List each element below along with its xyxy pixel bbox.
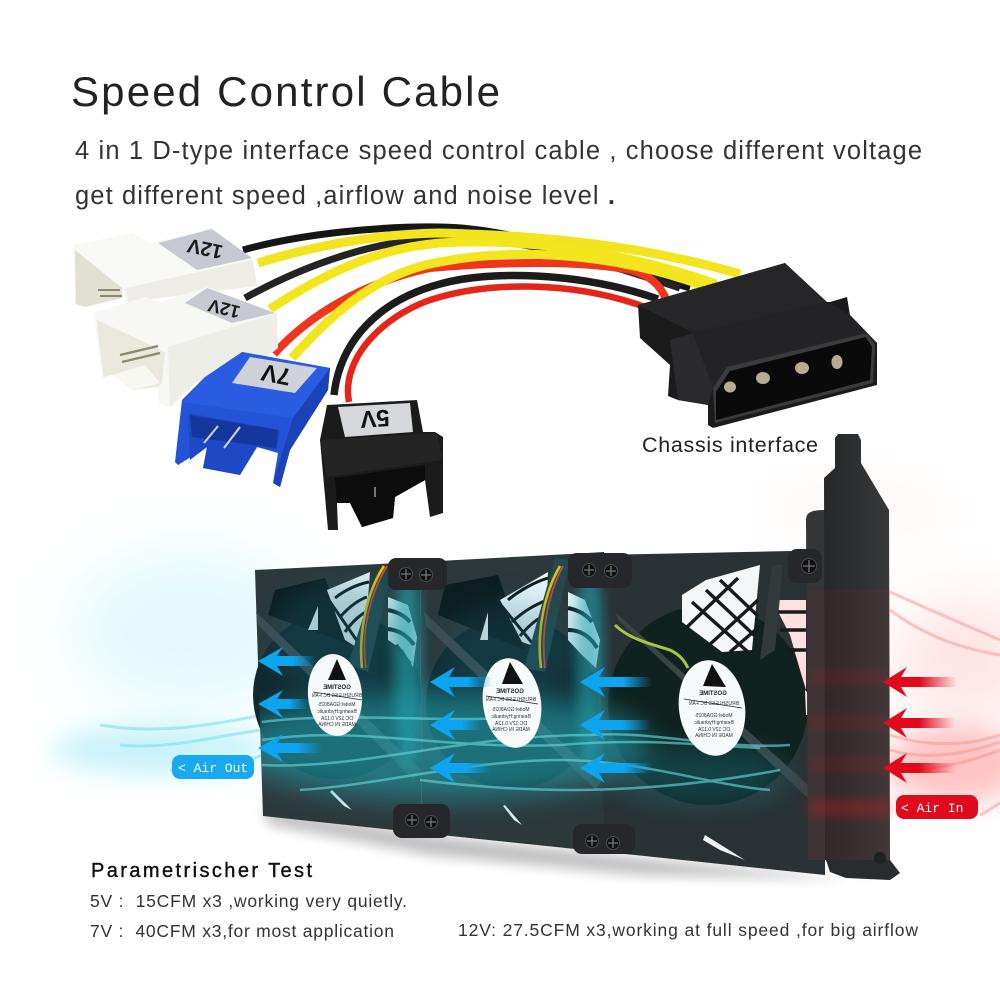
- fan assembly: [230, 434, 900, 880]
- parameter test lines: 7V : 40CFM x3,for most application: [90, 921, 394, 941]
- badge: air out: < Air Out: [178, 761, 248, 776]
- teal airflow overlay: [230, 550, 790, 805]
- fan labels: Model:GDA8025: [318, 702, 355, 708]
- connector: 5V black: 5V: [359, 404, 391, 432]
- fan labels: DC:12V 0.12A: [320, 716, 353, 722]
- pci bracket: [806, 434, 900, 880]
- subtitle text: [75, 137, 922, 210]
- fan labels: BRUSHLESS DC FAN: [689, 701, 739, 707]
- connector: 12V white (second): 12V: [206, 295, 242, 322]
- fan labels: MADE IN CHINA: [317, 722, 356, 728]
- connector: 5V black: [320, 400, 443, 530]
- parameter test lines: [90, 891, 918, 941]
- connector: 7V blue: [175, 352, 330, 487]
- screw plates: [388, 549, 822, 854]
- fan labels: Bearing:Hydraulic: [694, 720, 734, 726]
- fan labels: GOSTIME: [323, 685, 351, 691]
- parameter test lines: 12V: 27.5CFM x3,working at full speed ,for big airflow: [458, 920, 918, 940]
- fan labels: BRUSHLESS DC FAN: [312, 693, 362, 699]
- subtitle text: get different speed ,airflow and noise level .: [75, 182, 615, 210]
- parameter test lines: 5V : 15CFM x3 ,working very quietly.: [90, 891, 407, 911]
- fan labels: DC:12V 0.12A: [494, 721, 527, 727]
- fan labels: MADE IN CHINA: [694, 733, 733, 739]
- fan labels: Bearing:Hydraulic: [317, 709, 357, 715]
- fan labels: [305, 652, 751, 760]
- fan labels: DC:12V 0.12A: [697, 727, 730, 733]
- connector: 12V white (second): [93, 287, 278, 407]
- cable wires: [243, 227, 740, 402]
- label: chassis interface: Chassis interface: [642, 433, 818, 457]
- badge: air out: [172, 755, 254, 779]
- airflow arrows: out (blue): [258, 647, 652, 783]
- badge: air in: < Air In: [901, 801, 963, 816]
- badge: air in: [896, 795, 978, 819]
- subtitle text: 4 in 1 D-type interface speed control cable , choose different voltage: [75, 137, 922, 165]
- background air haze: [50, 475, 1000, 815]
- title: Speed Control Cable: [71, 68, 500, 115]
- fan labels: MADE IN CHINA: [491, 727, 530, 733]
- fan 1: [253, 562, 422, 833]
- fan labels: BRUSHLESS DC FAN: [486, 697, 536, 703]
- molex chassis connector: [638, 263, 877, 428]
- connector: 12V white (top): 12V: [185, 233, 225, 262]
- fan labels: Model:GDA8025: [695, 713, 732, 719]
- fan labels: GOSTIME: [699, 691, 727, 697]
- fan labels: GOSTIME: [496, 689, 524, 695]
- fan labels: Model:GDA8025: [492, 707, 529, 713]
- fan labels: Bearing:Hydraulic: [491, 714, 531, 720]
- parameter test heading: Parametrischer Test: [91, 860, 312, 882]
- airflow arrows: in (red): [883, 667, 957, 783]
- fan 2: [420, 552, 604, 852]
- fan 3: [600, 551, 825, 875]
- connector: 12V white (top): [73, 228, 257, 307]
- fan shadow: [262, 808, 900, 880]
- connector: 7V blue: 7V: [259, 358, 293, 390]
